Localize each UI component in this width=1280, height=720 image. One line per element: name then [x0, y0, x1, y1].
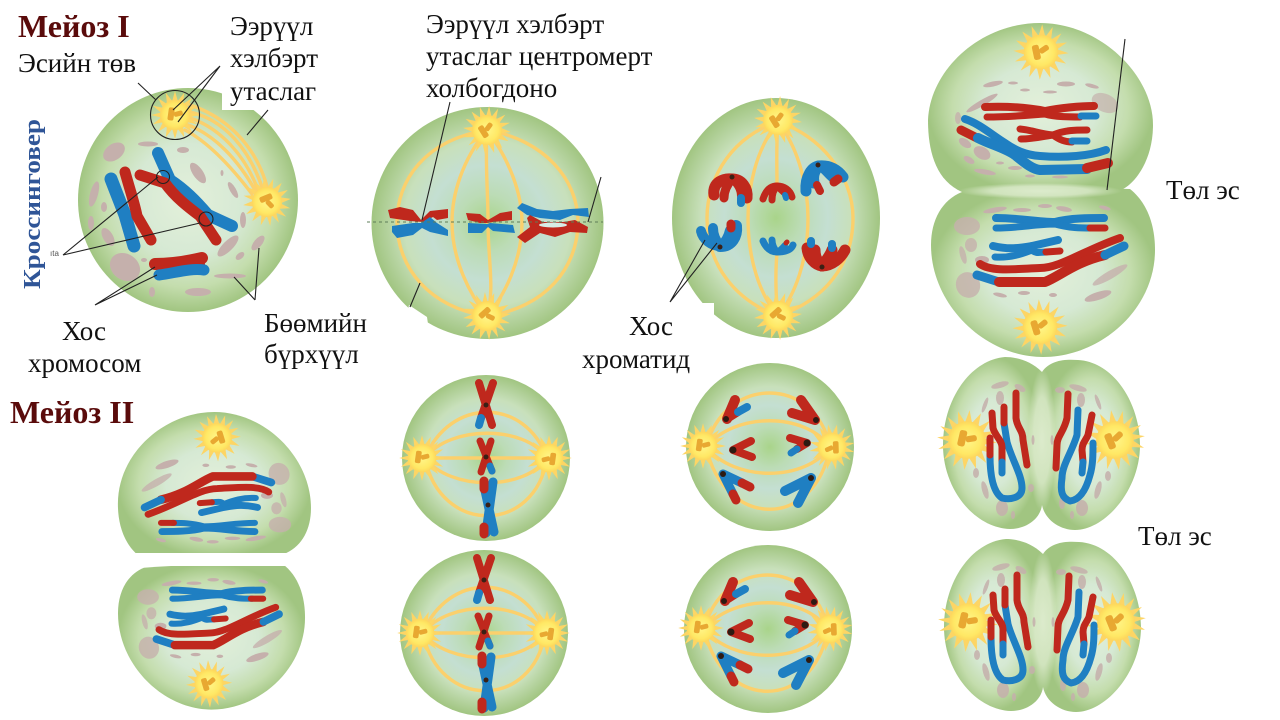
chromatids bottom left — [701, 224, 736, 250]
label: nuclear membrane: Бөөмийн — [264, 308, 367, 338]
nucleus membrane fragments — [955, 79, 1121, 178]
cell: anaphase I — [672, 86, 880, 350]
chromosome pair 2 — [140, 153, 232, 240]
chromatids top right — [806, 162, 843, 191]
small red chromosome — [1020, 129, 1087, 142]
label: sister chromatids: хроматид — [582, 344, 690, 374]
label: fibres attach to centromere: холбогдоно — [426, 73, 557, 103]
label: fibres attach to centromere: утаслаг центромерт — [426, 41, 653, 71]
cell: telophase I (bottom) — [931, 188, 1155, 364]
cell: telophase II top pair — [934, 357, 1156, 530]
centrosome — [1006, 17, 1076, 87]
label: fibres attach to centromere: Ээрүүл хэлбэрт — [426, 9, 604, 39]
centrosome top — [744, 86, 812, 154]
chromatids top left — [714, 174, 747, 203]
white notch in cell 2 — [405, 305, 428, 324]
crossing over circles — [156, 170, 213, 226]
cropped label fragment: ıta — [50, 249, 59, 258]
centrosome top — [453, 96, 521, 164]
cell: telophase II bottom pair — [935, 539, 1157, 712]
label: spindle fibres: утаслаг — [230, 76, 316, 106]
cell: metaphase II bottom — [397, 550, 570, 716]
cell: prophase I — [78, 88, 300, 312]
chromosomes right — [517, 203, 589, 243]
spindle fibres — [397, 130, 578, 316]
cleavage band between telophase I cells — [958, 183, 1122, 199]
leader lines — [63, 39, 1125, 307]
centrosome bottom — [453, 282, 521, 350]
metaphase plate — [367, 221, 603, 223]
cell: prophase II top half — [118, 406, 311, 557]
label: spindle fibres — [230, 11, 318, 106]
centrosome bottom — [744, 282, 812, 350]
cell: metaphase I — [367, 96, 604, 350]
label: homologous chromosomes: хромосом — [28, 348, 141, 378]
chromatids top middle — [763, 186, 792, 200]
spindle fibres — [185, 105, 268, 194]
label: nuclear membrane: бүрхүүл — [264, 339, 359, 369]
chromatids bottom middle — [763, 240, 793, 252]
white notch in cell 1 — [222, 85, 272, 110]
label: spindle fibres: хэлбэрт — [230, 43, 318, 73]
label: sister chromatids: Хос — [629, 311, 673, 341]
label: homologous chromosomes: Хос — [62, 316, 106, 346]
nucleus membrane fragments — [87, 139, 267, 297]
chromosome pair 1 — [111, 172, 151, 246]
label: fibres attach to centromere — [426, 9, 653, 103]
cell: prophase II bottom half — [118, 564, 305, 715]
label: spindle fibres: Ээрүүл — [230, 11, 313, 41]
label: daughter cells (meiosis I): Төл эс — [1166, 175, 1240, 205]
label: sister chromatids — [582, 311, 690, 374]
chromatids bottom right — [807, 241, 845, 270]
label: cell centre: Эсийн төв — [18, 48, 136, 78]
label: crossing over: Кроссинговер — [20, 119, 46, 289]
cell: metaphase II top — [399, 375, 572, 541]
centrosome sun 1 — [151, 91, 199, 139]
centrosome sun 2 — [234, 169, 300, 235]
cell: telophase I (top) — [928, 17, 1153, 193]
label: homologous chromosomes — [28, 316, 141, 378]
label: nuclear membrane — [264, 308, 367, 369]
chromosomes left — [388, 207, 448, 238]
centrosome circle — [150, 90, 200, 140]
spindle fibres — [707, 122, 853, 316]
red chromosome — [985, 106, 1096, 117]
cell: anaphase II bottom — [678, 545, 856, 713]
title: Meiosis II: Мейоз II — [10, 394, 134, 430]
title: Meiosis I: Мейоз I — [18, 8, 130, 44]
chromosome pair 3 — [155, 258, 204, 275]
cell: anaphase II top — [680, 363, 858, 531]
white notch in cell 3 — [690, 303, 714, 320]
chromosomes middle — [466, 211, 515, 233]
long blue chromosome — [961, 119, 1108, 170]
label: daughter cells (meiosis II): Төл эс — [1138, 521, 1212, 551]
